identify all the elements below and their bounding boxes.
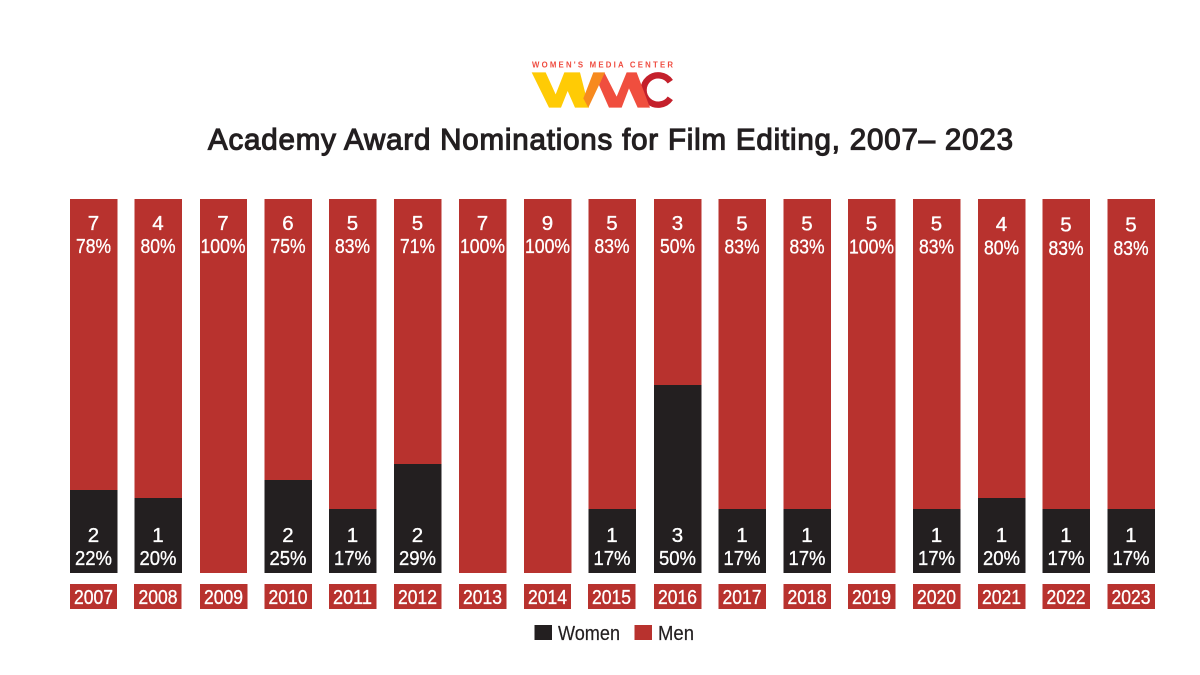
- bar: 2021: 80%: [984, 236, 1019, 260]
- bar: 2017: 1: [736, 524, 748, 547]
- bar: 2010: 25%: [270, 547, 306, 570]
- bar: 2011: 17%: [334, 547, 371, 570]
- year labels: [70, 584, 1155, 609]
- legend: [534, 623, 694, 645]
- bar: 2015: [588, 199, 636, 573]
- bar: 2008: 1: [152, 524, 164, 547]
- legend: Women: [558, 623, 620, 645]
- bar: 2021: [978, 199, 1026, 573]
- bar: 2010: [264, 199, 312, 573]
- bar: 2021: 1: [996, 524, 1007, 547]
- bar: 2015: 17%: [594, 547, 630, 570]
- year labels: 2017: [722, 586, 762, 609]
- bar: 2013: 100%: [460, 235, 505, 258]
- bar: 2011: 83%: [335, 235, 370, 258]
- bar: 2012: [394, 199, 442, 573]
- bar: 2008: [134, 199, 182, 573]
- bar: 2012: 71%: [400, 235, 435, 258]
- bar: 2020: 5: [931, 212, 942, 236]
- bar: 2022: [1042, 199, 1090, 573]
- year labels: 2015: [592, 586, 631, 609]
- bar: 2014: 9: [542, 212, 553, 235]
- bar: 2020: 1: [931, 524, 942, 547]
- bar: 2016: 50%: [660, 235, 695, 258]
- bar: 2019: 5: [866, 212, 877, 236]
- year labels: 2021: [982, 586, 1021, 609]
- bar: 2016: [654, 199, 702, 573]
- bar: 2011: 1: [347, 524, 358, 547]
- bar: 2014: [524, 199, 572, 573]
- bar: 2022: 17%: [1048, 547, 1084, 570]
- bar: 2011: 5: [347, 212, 358, 235]
- bar: 2018: 1: [801, 524, 813, 547]
- bar: 2007: 2: [88, 524, 99, 547]
- bar: 2019: 100%: [849, 236, 894, 258]
- bar: 2016: 3: [672, 524, 683, 547]
- bar: 2010: 2: [282, 524, 294, 547]
- bar: 2014: 100%: [525, 235, 570, 258]
- bar: 2007: [70, 199, 118, 573]
- bar: 2015: 1: [606, 524, 618, 547]
- year labels: 2011: [333, 586, 372, 609]
- bar: 2007: 7: [88, 212, 99, 235]
- bar: 2012: 5: [412, 212, 423, 235]
- bar: 2012: 2: [412, 524, 423, 547]
- year labels: 2022: [1046, 586, 1086, 609]
- logo: Women's Media Center: WOMEN'S MEDIA CENTER: [532, 60, 673, 70]
- bar: 2023: 5: [1125, 214, 1137, 236]
- bar: 2019: [848, 199, 896, 573]
- bar: 2023: [1108, 199, 1155, 573]
- bar: 2022: 5: [1060, 214, 1072, 236]
- stacked bar chart: [70, 199, 1155, 573]
- bar: 2013: 7: [477, 212, 488, 235]
- bar: 2017: [718, 199, 766, 573]
- bar: 2017: 83%: [724, 236, 760, 258]
- bar: 2008: 4: [152, 212, 164, 235]
- bar: 2017: 5: [736, 212, 748, 236]
- bar: 2013: [459, 199, 506, 573]
- year labels: 2014: [528, 586, 567, 609]
- logo: Women's Media Center: [532, 60, 673, 108]
- bar: 2012: 29%: [399, 547, 436, 570]
- bar: 2021: 4: [996, 213, 1007, 236]
- year labels: 2023: [1112, 586, 1150, 609]
- bar: 2022: 83%: [1048, 237, 1084, 260]
- bar: 2015: 5: [606, 212, 618, 235]
- bar: 2010: 75%: [270, 235, 306, 258]
- bar: 2023: 17%: [1112, 547, 1150, 570]
- year labels: 2020: [917, 586, 956, 609]
- bar: 2017: 17%: [724, 547, 760, 570]
- bar: 2023: 83%: [1114, 237, 1148, 260]
- bar: 2018: 83%: [790, 236, 824, 258]
- bar: 2007: 78%: [76, 235, 111, 258]
- bar: 2018: [784, 199, 831, 573]
- bar: 2021: 20%: [983, 547, 1020, 570]
- bar: 2015: 83%: [594, 235, 630, 258]
- bar: 2020: [913, 199, 960, 573]
- bar: 2007: 22%: [75, 547, 112, 570]
- bar: 2008: 20%: [140, 547, 176, 570]
- year labels: 2016: [658, 586, 697, 609]
- legend: Men: [658, 623, 694, 645]
- year labels: 2013: [463, 586, 502, 609]
- bar: 2023: 1: [1125, 524, 1137, 547]
- bar: 2022: 1: [1060, 524, 1072, 547]
- bar: 2008: 80%: [140, 235, 176, 258]
- year labels: 2018: [788, 586, 826, 609]
- bar: 2016: 50%: [659, 547, 696, 570]
- bar: 2018: 17%: [788, 547, 826, 570]
- year labels: 2008: [138, 586, 178, 609]
- bar: 2009: [200, 199, 247, 573]
- bar: 2018: 5: [801, 212, 813, 236]
- year labels: 2012: [398, 586, 437, 609]
- bar: 2009: 7: [217, 212, 229, 235]
- bar: 2016: 3: [672, 212, 683, 235]
- year labels: 2009: [204, 586, 243, 609]
- bar: 2010: 6: [282, 212, 294, 235]
- bar: 2020: 83%: [919, 236, 954, 258]
- bar: 2020: 17%: [918, 547, 955, 570]
- title: Academy Award Nominations for Film Editing, 2007– 2023: [208, 124, 1013, 156]
- bar: 2011: [329, 199, 376, 573]
- year labels: 2007: [74, 586, 113, 609]
- year labels: 2019: [852, 586, 891, 609]
- bar: 2009: 100%: [200, 235, 246, 258]
- year labels: 2010: [268, 586, 308, 609]
